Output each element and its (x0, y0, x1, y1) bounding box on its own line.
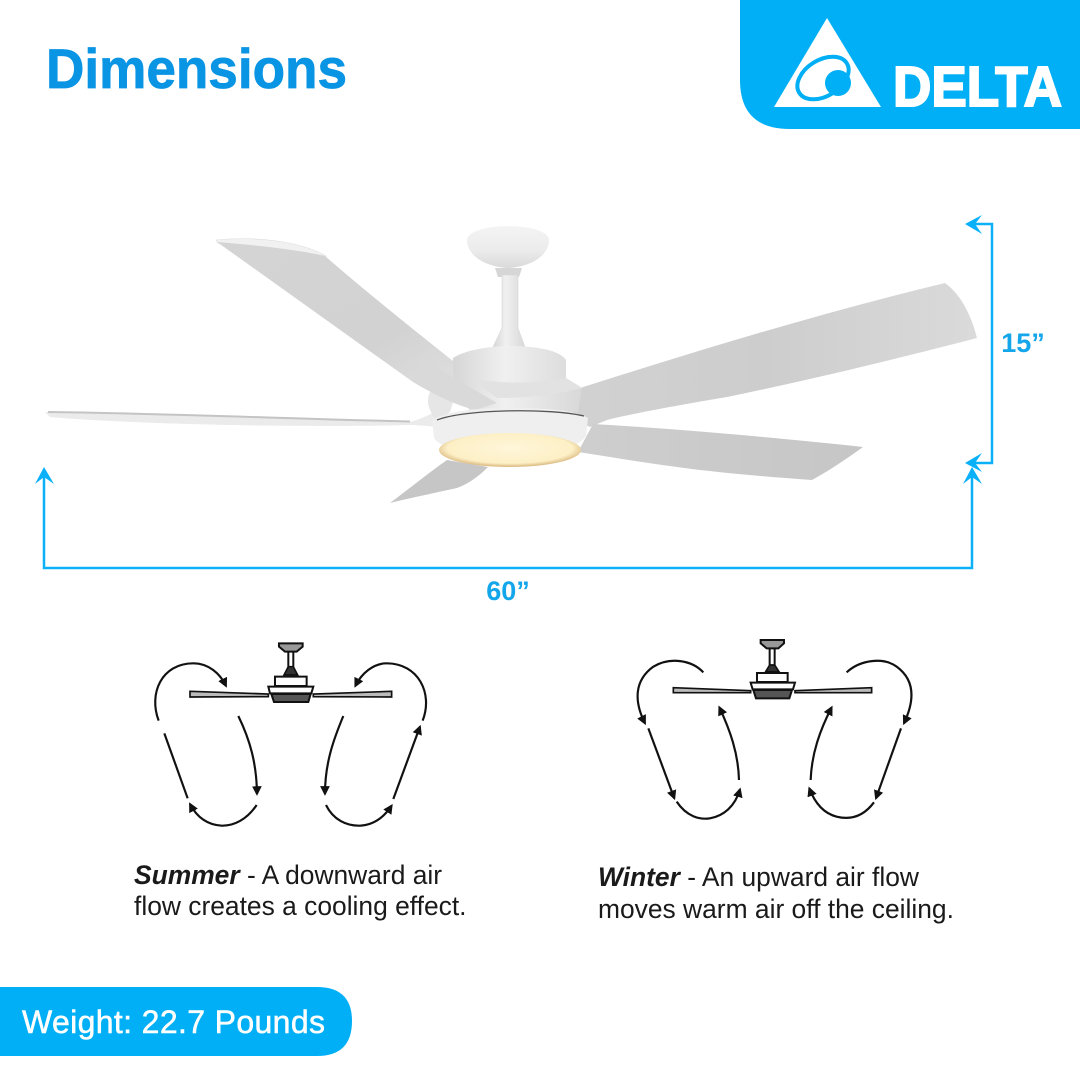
caption: winter: Winter (598, 862, 682, 892)
caption: summer: - A downward air (240, 860, 442, 890)
small fan silhouette (190, 643, 392, 702)
fan blade: lower right (578, 424, 863, 480)
fan blade: right (552, 283, 977, 427)
downrod (493, 275, 525, 347)
caption: winter: moves warm air off the ceiling. (598, 894, 954, 924)
motor base tier (470, 378, 582, 398)
label: 15 inches: 15” (1001, 328, 1045, 358)
diagram: summer airflow (155, 643, 426, 826)
motor housing (453, 346, 582, 412)
dimension: 60 inch width (35, 467, 982, 568)
weight badge (0, 987, 352, 1056)
label: 60 inches: 60” (486, 576, 530, 606)
icon: Delta triangle (774, 18, 881, 108)
title: Dimensions (46, 37, 347, 100)
lamp glow (439, 433, 581, 467)
upper left blade root (413, 358, 497, 410)
seam (437, 411, 584, 420)
caption: summer: Summer (134, 860, 241, 890)
lamp housing (432, 408, 588, 456)
logo: Delta badge (740, 0, 1080, 129)
logo wordmark: DELTA (893, 55, 1062, 119)
canopy (467, 226, 549, 268)
dimension: 15 inch height (965, 215, 992, 472)
fan blade: lower (390, 460, 488, 503)
caption: summer: flow creates a cooling effect. (134, 891, 467, 921)
fan blade: upper left (216, 239, 497, 403)
ceiling fan photo (45, 226, 977, 503)
diagram: winter airflow (638, 640, 911, 819)
caption: winter: - An upward air flow (680, 862, 920, 892)
small fan silhouette (673, 640, 872, 698)
airflow arrows (638, 661, 911, 819)
canopy neck (495, 268, 522, 277)
airflow arrows (155, 663, 426, 826)
fan blade: left (45, 404, 452, 428)
hub left side (428, 390, 455, 419)
weight badge: Weight: 22.7 Pounds (22, 1004, 325, 1040)
